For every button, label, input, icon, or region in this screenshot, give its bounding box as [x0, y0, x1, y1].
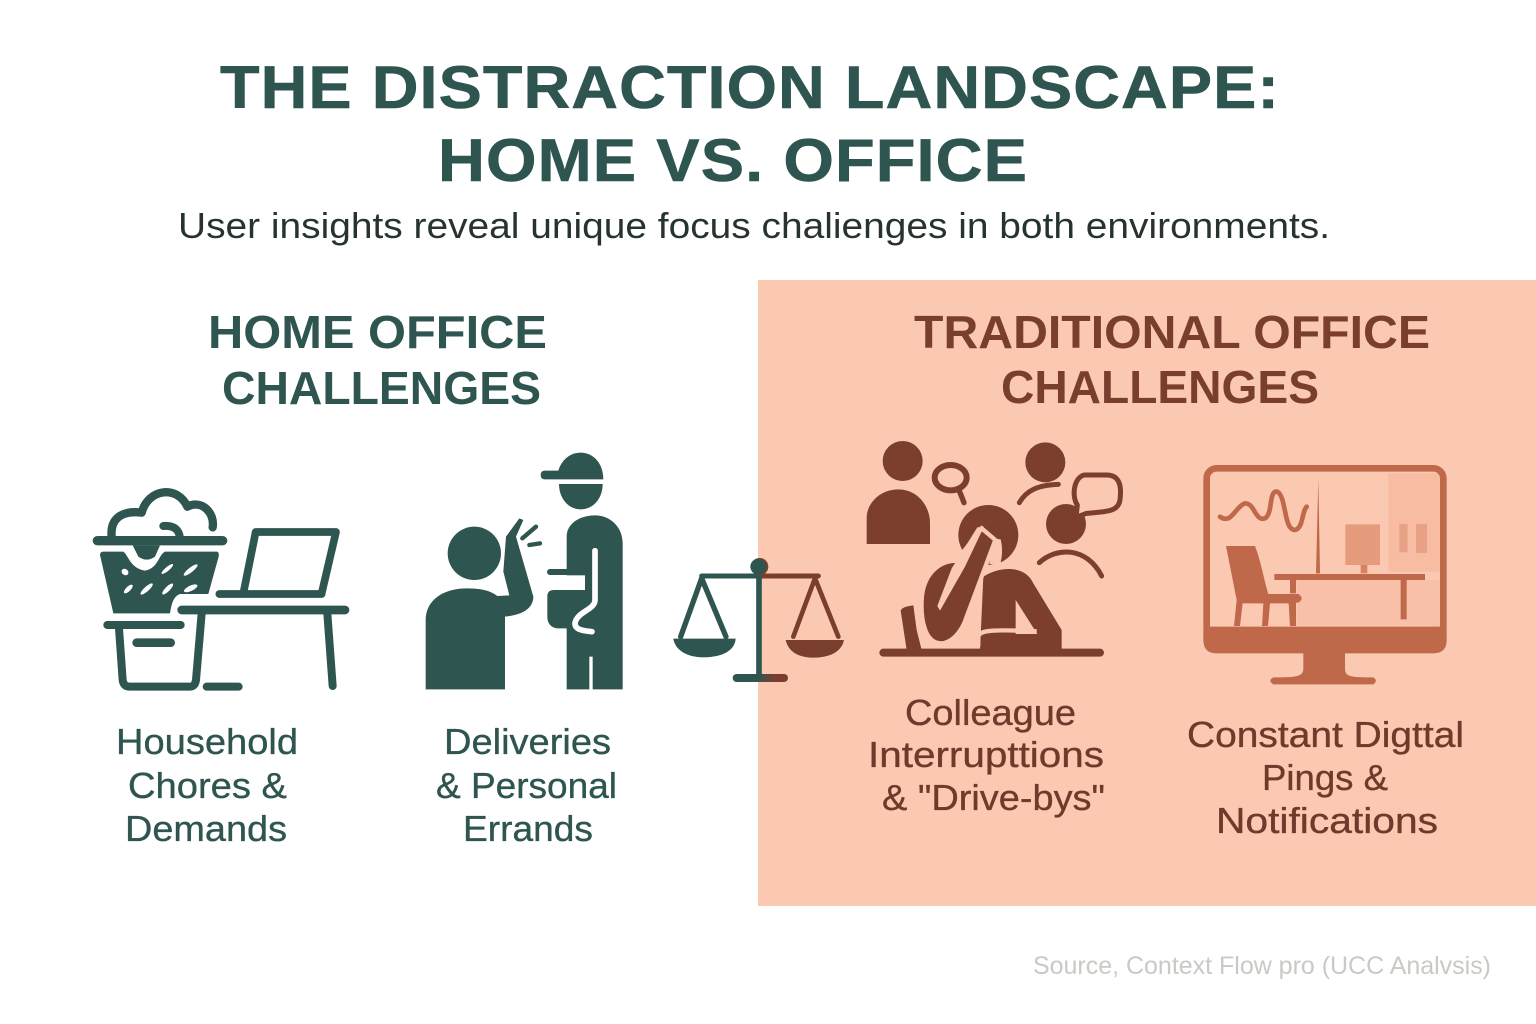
label: digital pings [1187, 714, 1464, 841]
label: digital pings: Pings & [1262, 757, 1388, 798]
label: colleague interruptions: & "Drive-bys" [882, 777, 1105, 818]
label: colleague interruptions: Colleague [905, 692, 1076, 733]
source note: Source, Context Flow pro (UCC Analvsis) [1033, 952, 1491, 980]
label: household chores: Chores & [128, 765, 287, 806]
heading: home office challenges: CHALLENGES [222, 362, 541, 414]
icon: person talking to delivery worker [426, 453, 623, 689]
heading: home office challenges [208, 306, 547, 414]
title: HOME VS. OFFICE [438, 127, 1028, 194]
label: colleague interruptions [868, 692, 1105, 818]
panel: traditional office background [758, 280, 1536, 906]
heading: traditional office challenges: CHALLENGES [1001, 361, 1319, 413]
heading: home office challenges: HOME OFFICE [208, 306, 547, 358]
label: digital pings: Constant Digttal [1187, 714, 1464, 755]
label: deliveries and errands: Errands [463, 808, 593, 849]
title [220, 54, 1280, 194]
label: deliveries and errands: & Personal [436, 765, 617, 806]
title: THE DISTRACTION LANDSCAPE: [220, 54, 1280, 121]
label: household chores: Household [116, 721, 298, 762]
subtitle: User insights reveal unique focus chalienges in both environments. [178, 205, 1330, 246]
label: household chores [116, 721, 298, 849]
label: deliveries and errands: Deliveries [444, 721, 611, 762]
heading: traditional office challenges: TRADITIONAL OFFICE [914, 306, 1430, 358]
icon: colleagues interrupting a stressed worker [867, 441, 1121, 653]
icon: monitor showing office scene [1203, 468, 1447, 684]
label: deliveries and errands [436, 721, 617, 849]
label: household chores: Demands [125, 808, 287, 849]
heading: traditional office challenges [914, 306, 1430, 413]
label: digital pings: Notifications [1216, 800, 1438, 841]
icon: laundry basket and laptop on desk [97, 492, 345, 687]
icon: balance scale [673, 558, 844, 678]
label: colleague interruptions: Interrupttions [868, 734, 1104, 775]
